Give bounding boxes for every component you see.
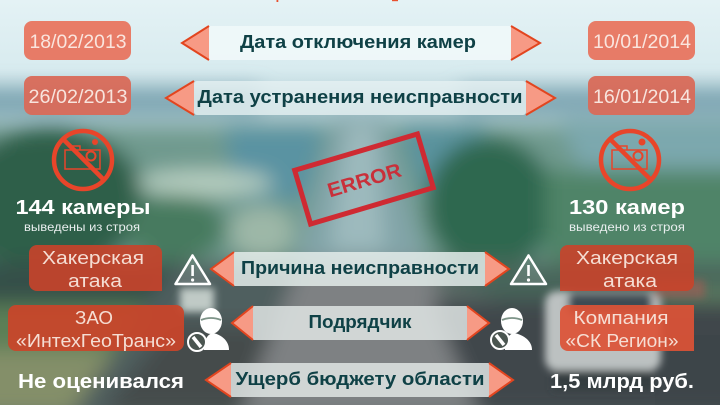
contractor box right bbox=[560, 305, 694, 351]
date pill: 18/02/2013 bbox=[24, 21, 131, 60]
label band with arrows bbox=[231, 306, 490, 340]
contractor box left: «ИнтехГеоТранс» bbox=[16, 331, 176, 351]
label band with arrows bbox=[181, 26, 541, 60]
date pill: 26/02/2013: 26/02/2013 bbox=[28, 87, 128, 108]
contractor box left: ЗАО bbox=[75, 308, 113, 328]
row: repair date bbox=[24, 76, 695, 115]
icon: technician bbox=[491, 308, 532, 350]
contractor box left bbox=[8, 305, 184, 351]
error stamp bbox=[295, 134, 433, 224]
caption: выведено из строя bbox=[569, 222, 685, 234]
error stamp: ERROR bbox=[325, 159, 405, 202]
label band with arrows bbox=[205, 363, 514, 397]
label band with arrows: Ущерб бюджету области bbox=[236, 369, 484, 389]
label band with arrows: Подрядчик bbox=[308, 312, 413, 332]
contractor box right: «СК Регион» bbox=[566, 331, 678, 351]
cause box left bbox=[29, 245, 162, 291]
date pill: 18/02/2013: 18/02/2013 bbox=[30, 32, 126, 53]
date pill: 16/01/2014: 16/01/2014 bbox=[593, 87, 691, 108]
damage value left: Не оценивался bbox=[18, 371, 184, 393]
row: camera shutdown date bbox=[24, 21, 695, 60]
icon: crossed-out camera bbox=[54, 131, 112, 189]
date pill: 10/01/2014 bbox=[588, 21, 695, 60]
cause box right: атака bbox=[603, 271, 658, 291]
cause box right bbox=[560, 245, 694, 291]
date pill: 10/01/2014: 10/01/2014 bbox=[593, 32, 691, 53]
caption: выведены из строя bbox=[24, 222, 140, 234]
row: cause bbox=[29, 245, 694, 291]
cause box left: атака bbox=[68, 271, 123, 291]
date pill: 16/01/2014 bbox=[588, 76, 695, 115]
cut-off title descenders bbox=[276, 0, 398, 2]
row: budget damage bbox=[18, 363, 694, 397]
icon: technician bbox=[188, 308, 229, 351]
label band with arrows bbox=[165, 81, 556, 115]
contractor box right: Компания bbox=[574, 308, 668, 328]
label band with arrows bbox=[210, 252, 510, 286]
cause box left: Хакерская bbox=[42, 248, 144, 268]
icon: warning triangle bbox=[511, 256, 546, 284]
label band with arrows: Дата устранения неисправности bbox=[198, 87, 522, 107]
right stat: 130 cameras bbox=[569, 131, 685, 234]
number: 130 камер bbox=[569, 197, 685, 219]
icon: warning triangle bbox=[176, 256, 210, 284]
date pill: 26/02/2013 bbox=[24, 76, 131, 115]
number: 144 камеры bbox=[16, 197, 150, 219]
row: contractor bbox=[8, 305, 694, 351]
cause box right: Хакерская bbox=[576, 248, 678, 268]
icon: crossed-out camera bbox=[601, 131, 659, 189]
damage value right: 1,5 млрд руб. bbox=[550, 371, 694, 393]
label band with arrows: Дата отключения камер bbox=[240, 32, 476, 52]
label band with arrows: Причина неисправности bbox=[241, 258, 479, 278]
left stat: 144 cameras bbox=[16, 131, 150, 234]
